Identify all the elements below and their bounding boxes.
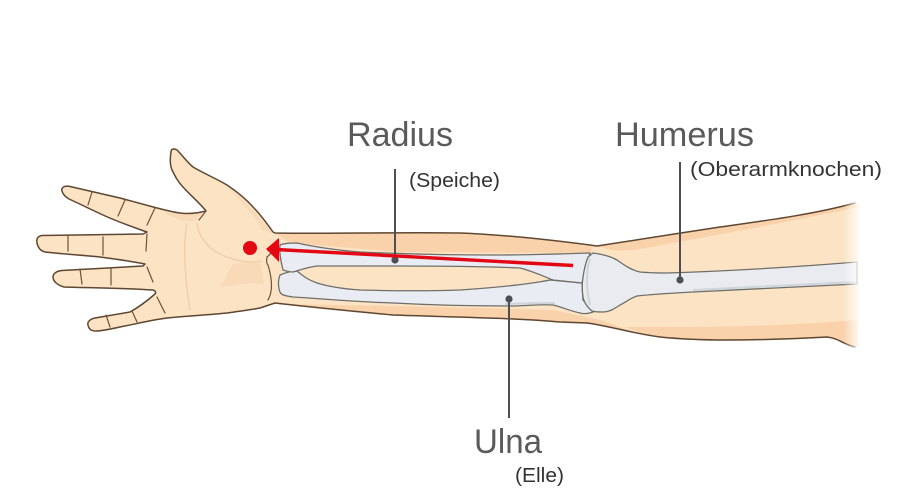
forearm shading [276,233,640,334]
leader line: Humerus [676,162,684,284]
finger and wrist creases [68,192,277,327]
arm and hand skin [37,149,860,347]
bone shadows [505,258,855,305]
palm lines [185,223,262,310]
ulna bone [278,271,593,314]
label: Oberarmknochen: (Oberarmknochen) [690,159,882,181]
arm illustration [37,149,862,353]
label: Radius: Radius [347,116,453,154]
label: Ulna: Ulna [474,423,542,461]
radius bone [280,243,590,283]
label: Humerus: Humerus [615,116,754,154]
leader line: Ulna [505,295,513,418]
upper arm shading [597,203,858,347]
fade at arm end [843,198,862,353]
red point on wrist [243,241,257,255]
leader line: Radius [391,169,399,264]
label: Elle: (Elle) [515,465,564,487]
humerus bone [582,253,857,312]
skin outline [37,149,855,347]
red arrow [266,238,573,266]
palm shading [163,187,272,288]
label: Speiche: (Speiche) [409,170,500,192]
